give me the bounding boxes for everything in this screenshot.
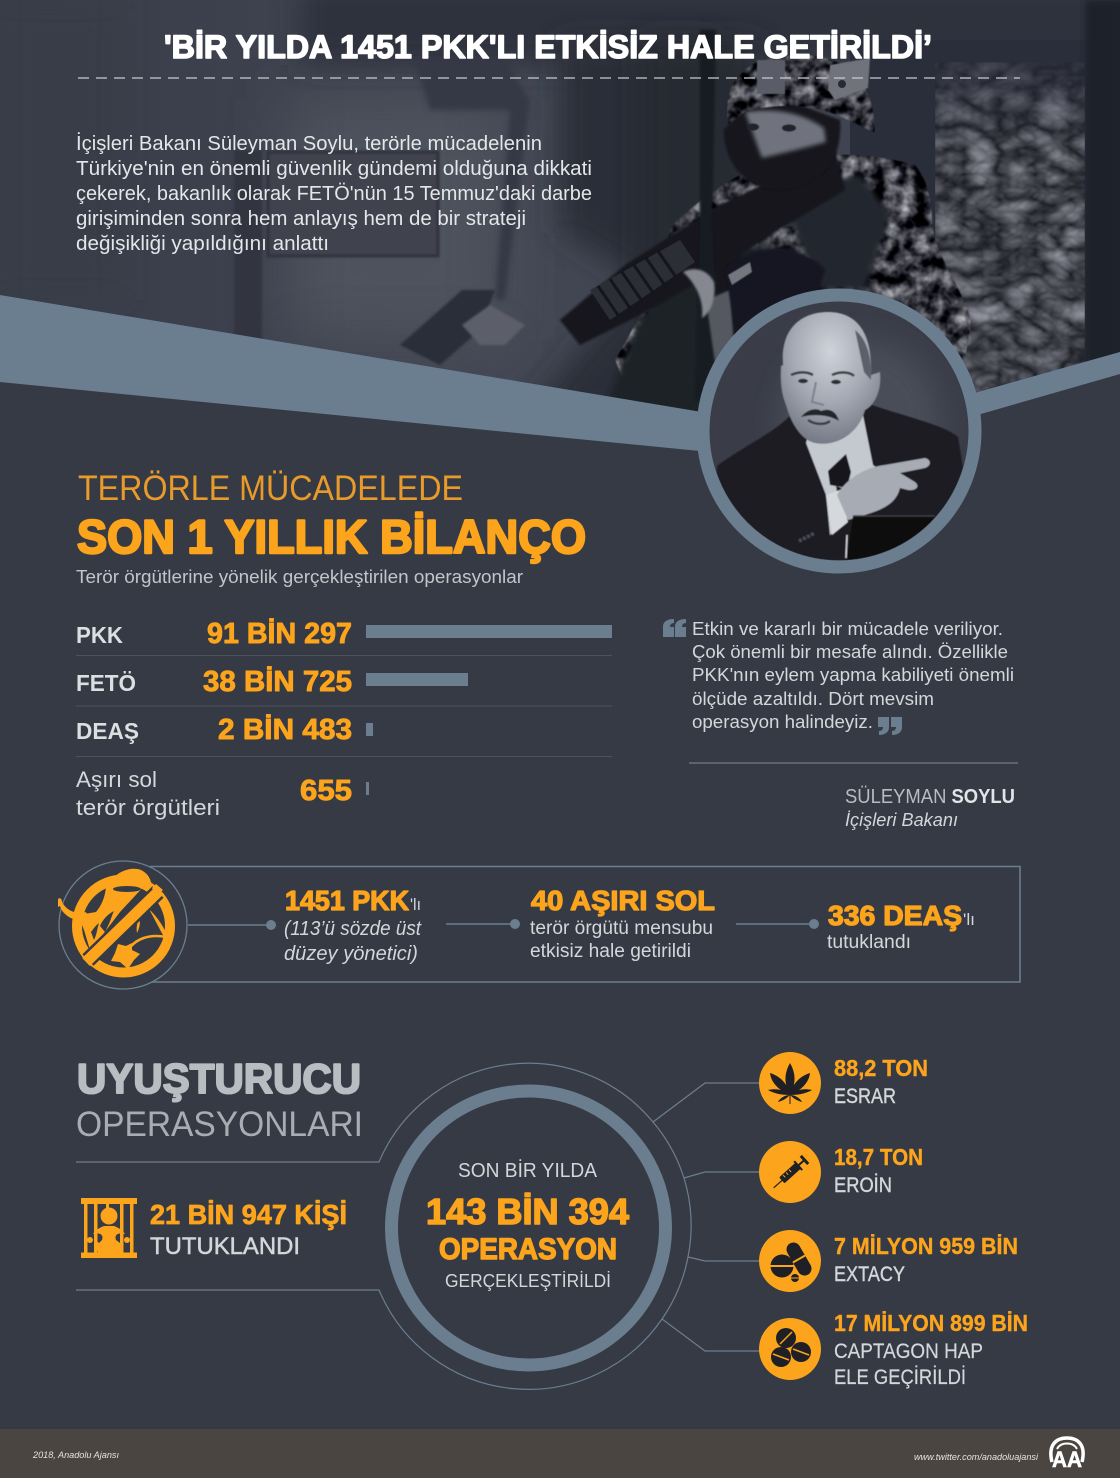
footer: 2018, Anadolu Ajansı <box>32 1450 119 1460</box>
connector lines around central circle <box>76 1063 760 1389</box>
stat: 1451 PKK: (113’ü sözde üst <box>284 918 422 940</box>
item: eroin: EROİN <box>834 1174 892 1197</box>
icon: opening quote mark <box>663 619 686 637</box>
stat: 1451 PKK: düzey yönetici) <box>284 943 418 965</box>
arrests stat: TUTUKLANDI <box>150 1233 300 1260</box>
stat: 1451 PKK: 'lı <box>410 895 421 914</box>
intro paragraph: çekerek, bakanlık olarak FETÖ'nün 15 Temmuz'daki darbe <box>76 183 592 205</box>
tree panel <box>935 62 1085 392</box>
row: aşırı sol: Aşırı sol <box>76 767 157 792</box>
intro paragraph: değişikliği yapıldığını anlattı <box>76 233 329 255</box>
intro paragraph: girişiminden sonra hem anlayış hem de bir strateji <box>76 208 526 230</box>
item: captagon: CAPTAGON HAP <box>834 1340 983 1363</box>
stat: 336 DEAŞ: 'lı <box>963 910 975 929</box>
stat: 1451 PKK <box>284 885 422 965</box>
panel: central operations total circle <box>392 1091 666 1365</box>
quote: Etkin ve kararlı bir mücadele veriliyor. <box>692 619 1003 639</box>
row: PKK <box>76 618 612 650</box>
row: PKK: 91 BİN 297 <box>207 618 352 650</box>
item: esrar: 88,2 TON <box>834 1055 928 1081</box>
icon: syringe <box>759 1141 821 1203</box>
quote: operasyon halindeyiz. <box>692 712 873 732</box>
quote: PKK'nın eylem yapma kabiliyeti önemli <box>692 665 1014 685</box>
drug operations heading: UYUŞTURUCU <box>77 1055 361 1102</box>
icon: AA logo: AA <box>1052 1447 1082 1472</box>
icon: banned terrorism emblem <box>58 861 187 989</box>
item: eroin <box>759 1141 923 1203</box>
soldier torso <box>615 154 971 374</box>
row: FETÖ: FETÖ <box>76 670 136 696</box>
item: captagon: ELE GEÇİRİLDİ <box>834 1366 966 1389</box>
row: DEAŞ: 2 BİN 483 <box>218 714 352 746</box>
icon: AA logo <box>1051 1438 1083 1472</box>
quote: Çok önemli bir mesafe alındı. Özellikle <box>692 642 1008 662</box>
icon: prisoner behind bars <box>81 1198 137 1258</box>
panel: neutralised summary box <box>58 861 1020 989</box>
stat: 1451 PKK: 1451 PKK <box>285 885 409 916</box>
weapon <box>560 150 845 345</box>
panel: central operations total circle: OPERASYON <box>439 1233 617 1266</box>
item: eroin: 18,7 TON <box>834 1144 923 1170</box>
quote: İçişleri Bakanı <box>845 810 958 830</box>
connector 1 <box>188 920 276 930</box>
footer: www.twitter.com/anadoluajansi <box>914 1452 1039 1462</box>
item: esrar: ESRAR <box>834 1085 896 1108</box>
stat: 40 aşırı sol: etkisiz hale getirildi <box>530 941 691 962</box>
row: DEAŞ: DEAŞ <box>76 718 139 744</box>
stat: 40 aşırı sol <box>530 885 715 962</box>
mask and face <box>723 106 842 187</box>
row: aşırı sol: 655 <box>300 775 352 807</box>
item: captagon <box>759 1310 1028 1389</box>
quote <box>663 619 1018 830</box>
panel: central operations total circle: SON BİR YILDA <box>458 1159 598 1182</box>
portrait: Süleyman Soylu <box>703 295 975 570</box>
row: FETÖ: 38 BİN 725 <box>203 666 352 698</box>
stat: 40 aşırı sol: 40 AŞIRI SOL <box>531 885 715 916</box>
drug operations heading: OPERASYONLARI <box>76 1105 363 1144</box>
icon: closing quote mark <box>878 717 902 735</box>
intro paragraph: Türkiye'nin en önemli güvenlik gündemi olduğuna dikkati <box>76 158 592 180</box>
panel: central operations total circle: 143 BİN 394 <box>426 1191 629 1232</box>
arrests stat: 21 BİN 947 KİŞİ <box>150 1199 347 1230</box>
drug operations heading <box>76 1055 363 1144</box>
row: PKK: PKK <box>76 622 123 648</box>
hero photo: soldier <box>230 0 1120 412</box>
stat: 336 DEAŞ <box>827 900 975 953</box>
section heading: terörle mücadelede: TERÖRLE MÜCADELEDE <box>78 468 463 508</box>
icon: pills <box>759 1230 821 1292</box>
arrests stat <box>81 1198 347 1260</box>
item: extacy <box>759 1230 1018 1292</box>
glove and hand <box>725 249 825 325</box>
row: aşırı sol <box>76 767 369 820</box>
section heading: terörle mücadelede: Terör örgütlerine yönelik gerçekleştirilen operasyonlar <box>76 567 523 587</box>
bar chart: operations by organisation <box>76 618 612 820</box>
item: captagon: 17 MİLYON 899 BİN <box>834 1310 1028 1336</box>
item: extacy: 7 MİLYON 959 BİN <box>834 1233 1018 1259</box>
item: extacy: EXTACY <box>834 1263 905 1286</box>
helmet <box>727 55 875 133</box>
wall frame detail <box>268 152 438 256</box>
connector 3 <box>736 919 819 929</box>
item: esrar <box>759 1052 928 1114</box>
section heading: terörle mücadelede <box>76 468 586 587</box>
slate diagonal band <box>0 295 1120 453</box>
stat: 40 aşırı sol: terör örgütü mensubu <box>530 918 713 939</box>
icon: three tablets <box>759 1318 821 1380</box>
title: 'BİR YILDA 1451 PKK'LI ETKİSİZ HALE GETİRİLDİ’ <box>164 29 932 65</box>
quote attribution: SÜLEYMAN SOYLU <box>845 786 1015 808</box>
icon: cannabis leaf <box>759 1052 821 1114</box>
row: FETÖ <box>76 666 468 698</box>
stat: 336 DEAŞ: tutuklandı <box>827 932 911 953</box>
intro paragraph: İçişleri Bakanı Süleyman Soylu, terörle mücadelenin <box>76 132 542 155</box>
row: aşırı sol: terör örgütleri <box>76 795 220 820</box>
panel: central operations total circle: GERÇEKLEŞTİRİLDİ <box>445 1271 611 1291</box>
footer <box>0 1429 1120 1478</box>
intro paragraph <box>76 132 592 255</box>
row: DEAŞ <box>76 714 373 746</box>
stat: 336 DEAŞ: 336 DEAŞ <box>828 900 962 931</box>
section heading: terörle mücadelede: SON 1 YILLIK BİLANÇO <box>77 510 586 563</box>
connector 2 <box>446 919 520 929</box>
quote: ölçüde azaltıldı. Dört mevsim <box>692 689 934 709</box>
title dashed divider <box>78 77 1020 79</box>
